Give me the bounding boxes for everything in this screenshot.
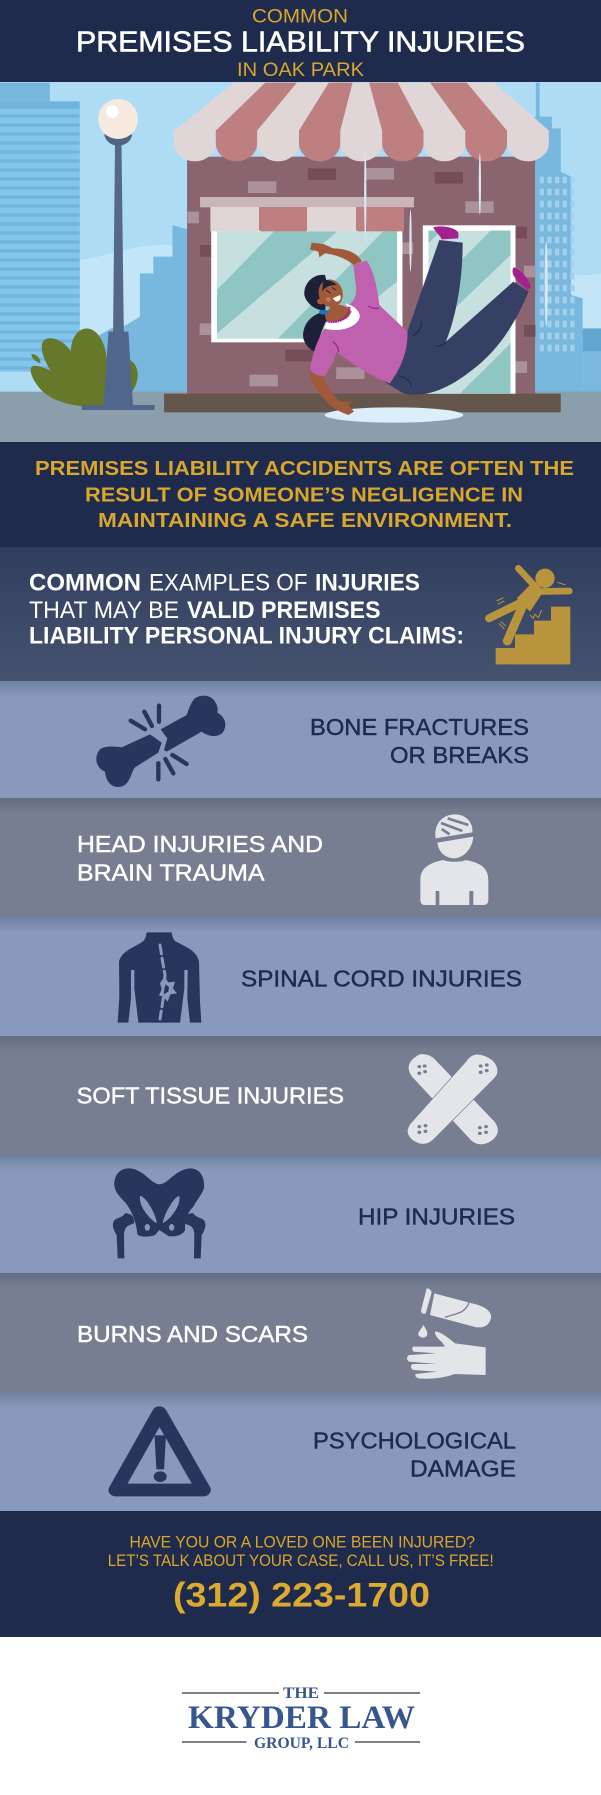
falling woman xyxy=(303,226,531,423)
icon: chemical spill on hand xyxy=(407,1288,491,1379)
intro text xyxy=(29,570,464,650)
panel: soft tissue injuries: SOFT TISSUE INJURIES xyxy=(77,1083,344,1109)
panel: psychological damage: PSYCHOLOGICAL xyxy=(313,1428,516,1454)
header banner xyxy=(0,0,601,82)
icon: bandaged head xyxy=(420,814,488,905)
icon: warning triangle xyxy=(116,1413,204,1490)
panel: burns and scars: BURNS AND SCARS xyxy=(77,1321,308,1347)
panel: soft tissue injuries xyxy=(0,1036,601,1155)
brick building xyxy=(187,157,535,394)
logo: the kryder law group: THE xyxy=(283,1685,319,1702)
panel: bone fractures xyxy=(0,681,601,798)
intro text: THAT MAY BE xyxy=(29,597,179,624)
panel: negligence statement: PREMISES LIABILITY ACCIDENTS ARE OFTEN THE xyxy=(35,457,574,480)
icon: pelvis xyxy=(113,1168,205,1258)
left skyscraper xyxy=(0,83,80,372)
icon: spine on back xyxy=(118,932,201,1023)
panel: spinal cord injuries xyxy=(0,917,601,1036)
intro text: LIABILITY PERSONAL INJURY CLAIMS: xyxy=(29,623,464,650)
door xyxy=(423,225,516,394)
step xyxy=(164,394,561,412)
rain streaks xyxy=(364,149,548,327)
icon: person falling on stairs xyxy=(489,568,570,664)
intro text: COMMON xyxy=(29,570,141,597)
panel: negligence statement: MAINTAINING A SAFE ENVIRONMENT. xyxy=(98,509,512,532)
panel: negligence statement xyxy=(0,442,601,547)
middle building xyxy=(80,225,188,392)
panel: head injuries: BRAIN TRAUMA xyxy=(77,860,265,886)
panel: spinal cord injuries: SPINAL CORD INJURIES xyxy=(241,966,522,992)
logo: the kryder law group xyxy=(182,1685,420,1752)
panel: head injuries xyxy=(0,798,601,917)
title: PREMISES LIABILITY INJURIES xyxy=(76,27,525,59)
panel: head injuries: HEAD INJURIES AND xyxy=(77,831,323,857)
panel: negligence statement: RESULT OF SOMEONE’S NEGLIGENCE IN xyxy=(85,484,523,507)
shop window xyxy=(200,197,414,342)
panel: psychological damage: DAMAGE xyxy=(410,1456,516,1482)
pavement xyxy=(0,392,601,442)
bricks xyxy=(187,168,535,386)
intro text: VALID PREMISES xyxy=(187,597,380,624)
panel: call to action xyxy=(0,1511,601,1637)
bush xyxy=(31,328,138,408)
street lamp xyxy=(82,99,154,410)
intro text: INJURIES xyxy=(315,570,420,597)
logo: the kryder law group: GROUP, LLC xyxy=(254,1735,349,1752)
phone number: (312) 223-1700 xyxy=(173,1577,430,1615)
icon: crossed bandages xyxy=(407,1054,498,1144)
panel: bone fractures: OR BREAKS xyxy=(390,742,529,768)
panel: bone fractures: BONE FRACTURES xyxy=(310,714,529,740)
panel: hip injuries: HIP INJURIES xyxy=(358,1204,515,1230)
panel: burns and scars xyxy=(0,1273,601,1392)
intro text: EXAMPLES OF xyxy=(149,570,308,597)
panel: hip injuries xyxy=(0,1155,601,1273)
panel: call to action: LET’S TALK ABOUT YOUR CASE, CALL US, IT’S FREE! xyxy=(108,1552,494,1570)
hero illustration: woman slipping outside storefront xyxy=(0,82,601,442)
icon: broken bone xyxy=(96,696,225,787)
awning xyxy=(174,83,549,161)
heading: location: IN OAK PARK xyxy=(237,60,364,81)
right skyscraper xyxy=(535,83,601,392)
panel: psychological damage xyxy=(0,1392,601,1511)
logo: the kryder law group: KRYDER LAW xyxy=(188,1700,415,1736)
puddle xyxy=(325,407,463,423)
heading: common: COMMON xyxy=(252,7,348,28)
panel: call to action: HAVE YOU OR A LOVED ONE BEEN INJURED? xyxy=(130,1533,475,1551)
panel: common examples intro xyxy=(0,547,601,681)
